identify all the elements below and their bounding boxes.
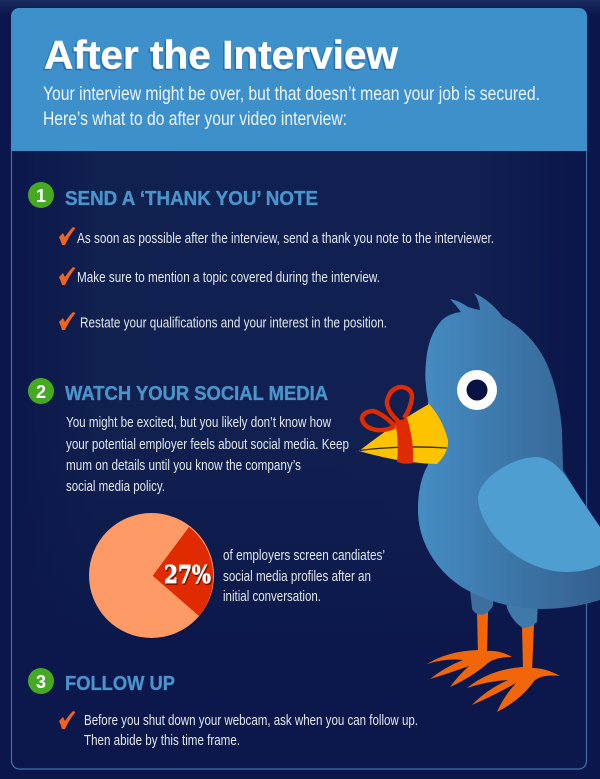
heading 1: SEND A ‘THANK YOU’ NOTE [65,188,318,210]
title: After the Interview [42,35,397,79]
panel: header [11,8,587,151]
icon: blue bird [359,293,600,712]
check item follow up [59,711,418,749]
social media paragraph: social media policy. [66,478,165,495]
intro text: Here’s what to do after your video interview: [43,108,347,130]
check item 2 [59,267,380,286]
number badge 3 [28,668,54,694]
bird feet [427,650,560,712]
pie caption: social media profiles after an [223,568,371,585]
check item 3: Restate your qualifications and your interest in the position. [80,314,387,332]
bird beak with ribbon [359,387,448,464]
check item follow up: Before you shut down your webcam, ask when you can follow up. [84,712,418,729]
pie chart 27%: 27% [164,560,211,589]
heading 2: WATCH YOUR SOCIAL MEDIA [65,383,328,405]
bird wing [478,457,600,572]
number badge 3: 3 [36,672,46,692]
number badge 1 [28,182,54,208]
social media paragraph: mum on details until you know the company’s [66,457,301,474]
intro text [43,83,540,130]
section 3 [28,668,418,749]
heading 3: FOLLOW UP [65,673,175,695]
social media paragraph: You might be excited, but you likely don’t know how [66,414,331,431]
pie chart 27% [89,513,215,640]
number badge 1: 1 [36,186,46,206]
pie caption: of employers screen candiates’ [223,547,385,564]
pie caption [223,547,385,605]
section 2 [28,378,385,640]
bird legs [470,590,538,672]
check item follow up: Then abide by this time frame. [84,732,240,749]
number badge 2: 2 [36,382,46,402]
title: After the Interview [44,34,399,78]
pie caption: initial conversation. [223,588,321,605]
bird eye [457,370,497,410]
section 1 [28,182,494,332]
check item 1 [59,227,494,247]
bird body [418,293,600,609]
check item 1: As soon as possible after the interview, send a thank you note to the interviewer. [77,230,494,247]
social media paragraph: your potential employer feels about social media. Keep [66,436,349,453]
check item 2: Make sure to mention a topic covered during the interview. [77,269,380,286]
social media paragraph [66,414,349,495]
panel: content body [12,120,586,769]
pie chart 27%: 27% [165,562,212,590]
number badge 2 [28,378,54,404]
check item 3 [59,312,387,332]
